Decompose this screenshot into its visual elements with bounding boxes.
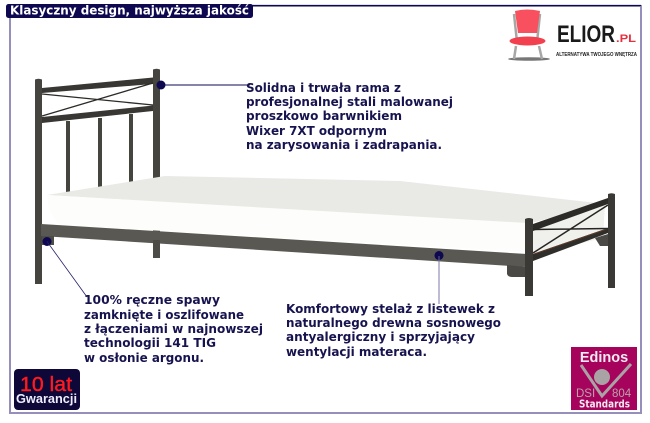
callout: frame: profesjonalnej stali malowanej (246, 94, 453, 109)
callout: frame (156, 80, 453, 152)
badge: Edinos DSI 804 Standards: DSI (576, 388, 595, 400)
logo: Elior.pl (508, 10, 637, 61)
callout: slats: naturalnego drewna sosnowego (286, 315, 501, 330)
callout: welds: z łączeniami w najnowszej (84, 321, 263, 336)
callout: welds: w osłonie argonu. (84, 350, 204, 365)
front left post (35, 79, 42, 284)
badge: 10 lat warranty (14, 369, 80, 410)
icon: red chair (508, 10, 550, 61)
badge: 10 lat warranty: 10 lat (20, 374, 72, 396)
callout: slats: Komfortowy stelaż z listewek z (286, 301, 495, 316)
callout: welds (42, 237, 263, 365)
logo: Elior.pl: ELIOR (557, 21, 615, 48)
callout: slats: antyalergiczny i sprzyjający (286, 329, 475, 344)
logo: Elior.pl: .PL (616, 33, 636, 45)
foot end (525, 193, 615, 296)
callout: slats: wentylacji materaca. (286, 344, 427, 359)
badge: Edinos DSI 804 Standards: Edinos (580, 350, 628, 366)
callout: welds: zamknięte i oszlifowane (84, 307, 244, 322)
side rail (41, 224, 527, 267)
callout: welds: 100% ręczne spawy (84, 292, 220, 307)
badge: Edinos DSI 804 Standards: Standards (579, 398, 630, 410)
callout: frame: Solidna i trwała rama z (246, 80, 401, 95)
title banner: Klasyczny design, najwyższa jakość (10, 2, 249, 18)
callout: frame: Wixer 7XT odpornym (246, 123, 387, 138)
callout: frame: na zarysowania i zadrapania. (246, 137, 442, 152)
callout: welds: technologii 141 TIG (84, 335, 216, 350)
illustration: metal bed with mattress (35, 69, 615, 296)
badge: 10 lat warranty: Gwarancji (16, 392, 77, 406)
mattress (47, 176, 606, 255)
headboard (42, 69, 160, 258)
callout: frame: proszkowo barwnikiem (246, 108, 402, 123)
callout: slats (286, 251, 501, 359)
badge: Edinos DSI 804 Standards: 804 (612, 388, 632, 400)
badge: Edinos DSI 804 Standards (571, 347, 637, 410)
